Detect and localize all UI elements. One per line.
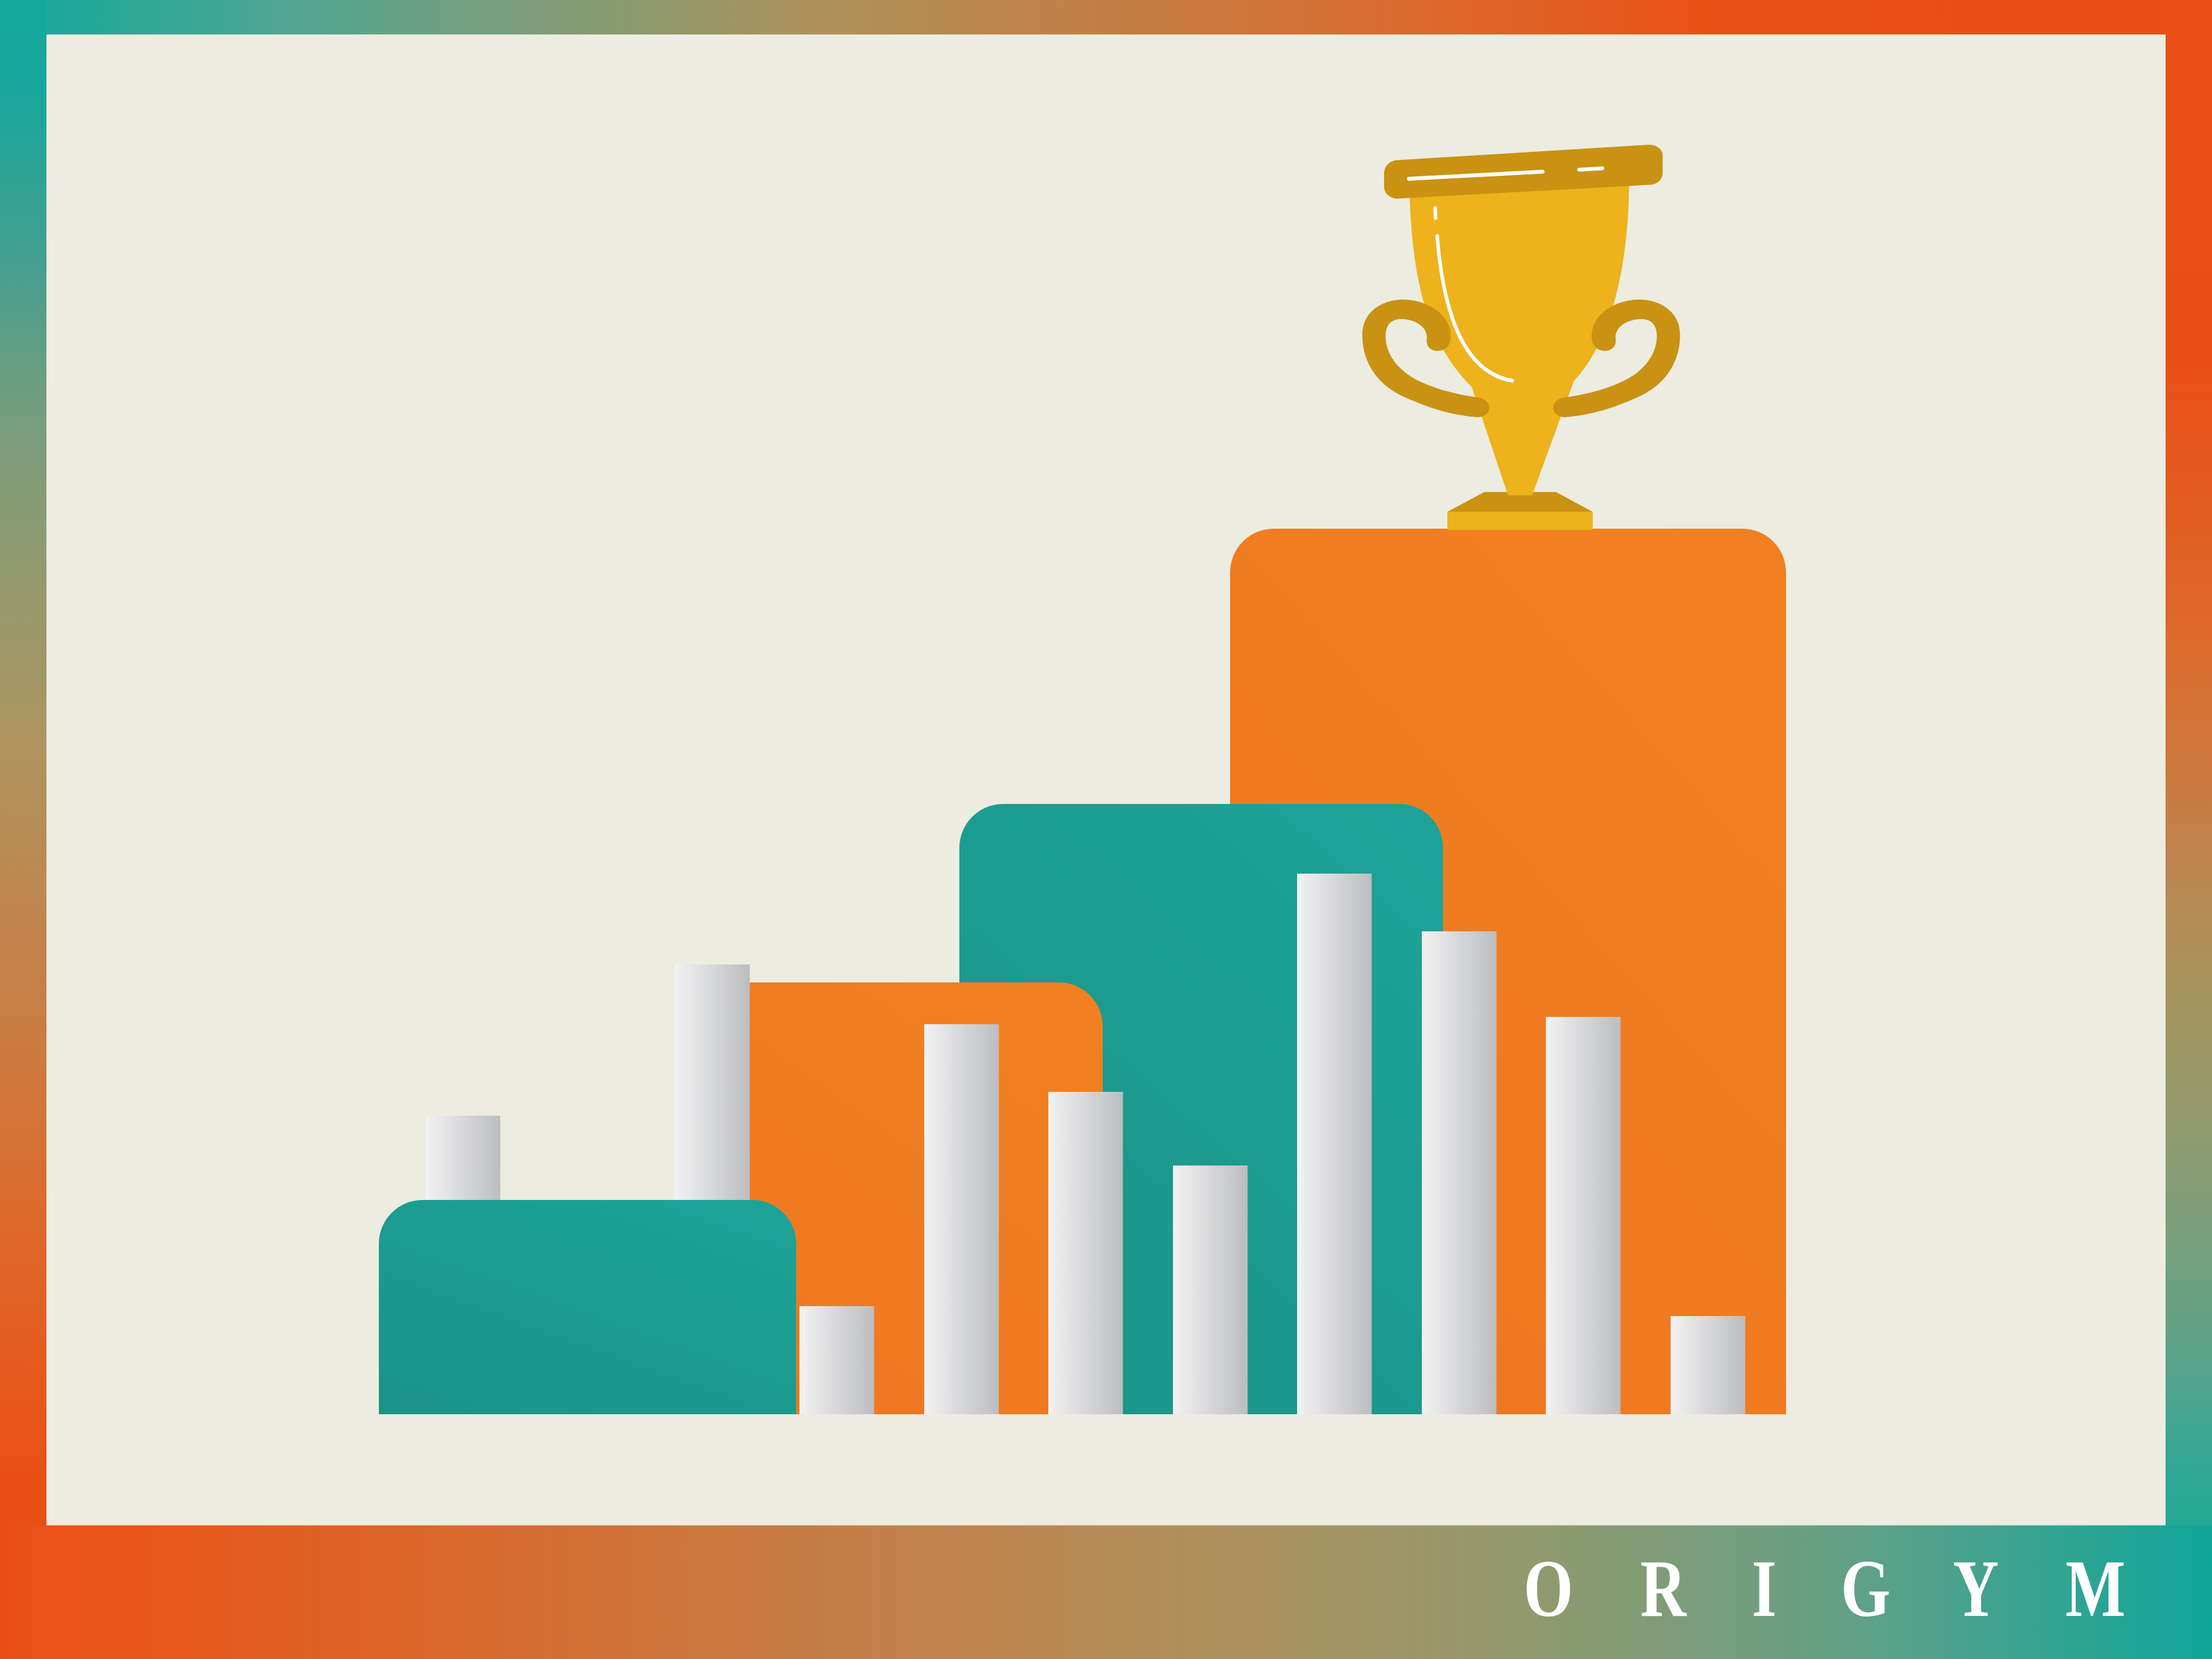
trophy lid — [1384, 145, 1663, 198]
trophy cup and base — [1384, 145, 1663, 530]
podium: front teal block — [379, 1200, 796, 1414]
trophy left handle — [1362, 300, 1489, 417]
trophy highlights — [1409, 168, 1602, 381]
podium: medium orange block — [683, 982, 1103, 1414]
logo: ORIGYM wordmark: ORIGYM — [1523, 1544, 2125, 1634]
podium: tallest orange block — [1230, 529, 1786, 1414]
trophy right handle — [1553, 300, 1680, 417]
trophy bowl — [1409, 180, 1629, 496]
icon: trophy — [1362, 145, 1680, 530]
trophy base top — [1447, 492, 1593, 512]
trophy base plinth — [1447, 512, 1593, 530]
podium: tall teal block — [959, 804, 1443, 1414]
bar chart: grey columns — [426, 874, 1745, 1414]
